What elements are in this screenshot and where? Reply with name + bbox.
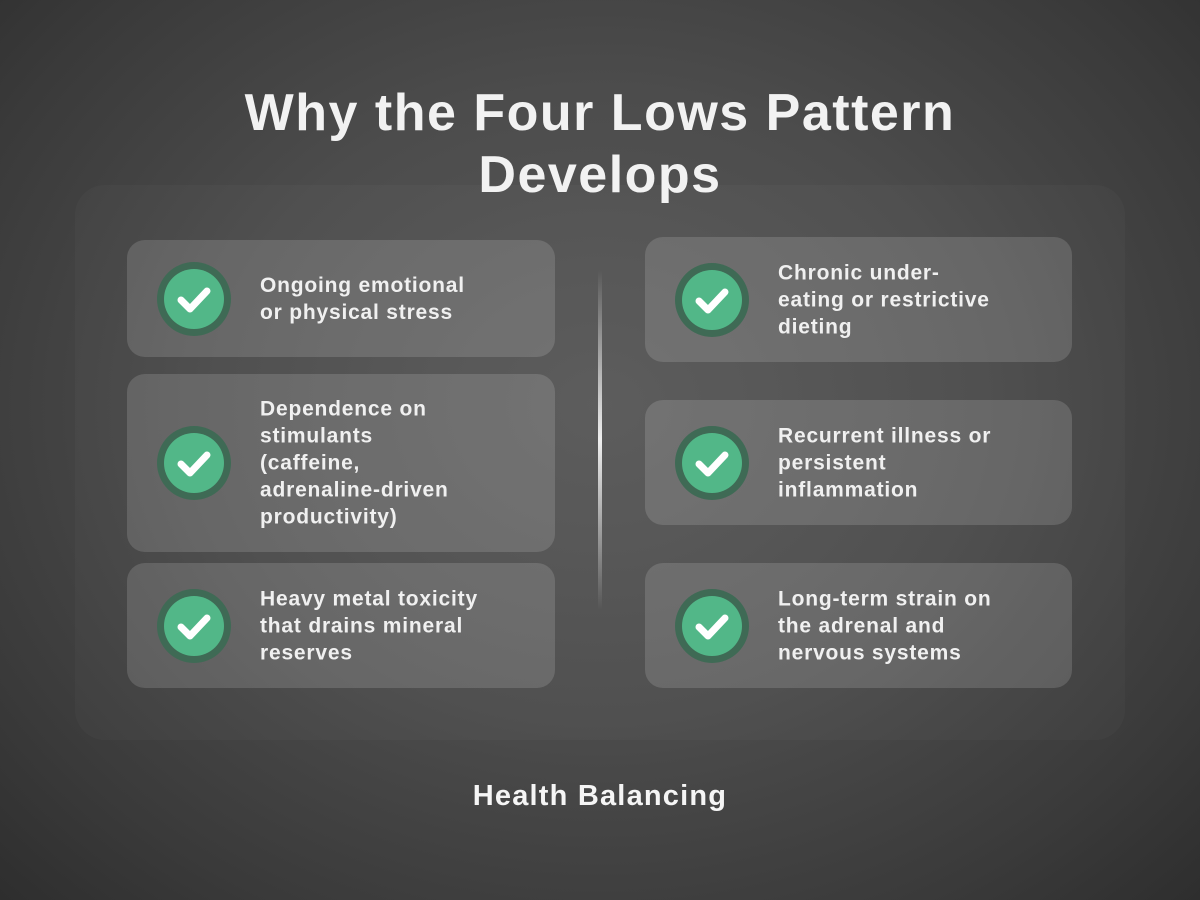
text: the adrenal and (778, 614, 945, 637)
text: eating or restrictive (778, 288, 990, 311)
text: productivity) (260, 506, 398, 528)
title: Develops (478, 146, 722, 204)
icon: check (675, 262, 749, 336)
icon: check (157, 426, 231, 500)
text (260, 398, 449, 528)
text: adrenaline-driven (260, 478, 449, 502)
icon: check (157, 262, 231, 336)
text: Chronic under- (778, 261, 940, 284)
text: Recurrent illness or (778, 424, 991, 447)
card: ongoing stress (127, 240, 555, 357)
icon: check (675, 588, 749, 662)
text: stimulants (260, 424, 373, 448)
card: illness (645, 400, 1072, 525)
text (260, 587, 478, 664)
title: Why the Four Lows Pattern (245, 84, 955, 142)
text: reserves (260, 641, 353, 664)
text: nervous systems (778, 641, 962, 664)
card: stimulants (127, 374, 555, 552)
text: or physical stress (260, 300, 453, 324)
card: under-eating (645, 237, 1072, 362)
text: persistent (778, 451, 886, 474)
text: that drains mineral (260, 614, 463, 637)
footer brand: Health Balancing (473, 780, 727, 812)
text: Ongoing emotional (260, 274, 465, 296)
text: inflammation (778, 478, 918, 501)
card: adrenal strain (645, 563, 1072, 688)
icon: check (157, 588, 231, 662)
text: dieting (778, 315, 852, 338)
text (260, 274, 465, 324)
card: heavy metal (127, 563, 555, 688)
icon: check (675, 426, 749, 500)
text (778, 587, 992, 664)
text: Long-term strain on (778, 587, 992, 610)
text: (caffeine, (260, 452, 360, 474)
divider line (598, 270, 602, 610)
panel: background container (75, 185, 1125, 740)
text (778, 424, 991, 501)
text: Heavy metal toxicity (260, 587, 478, 610)
text (778, 261, 990, 338)
title (244, 84, 955, 204)
text: Dependence on (260, 398, 427, 420)
